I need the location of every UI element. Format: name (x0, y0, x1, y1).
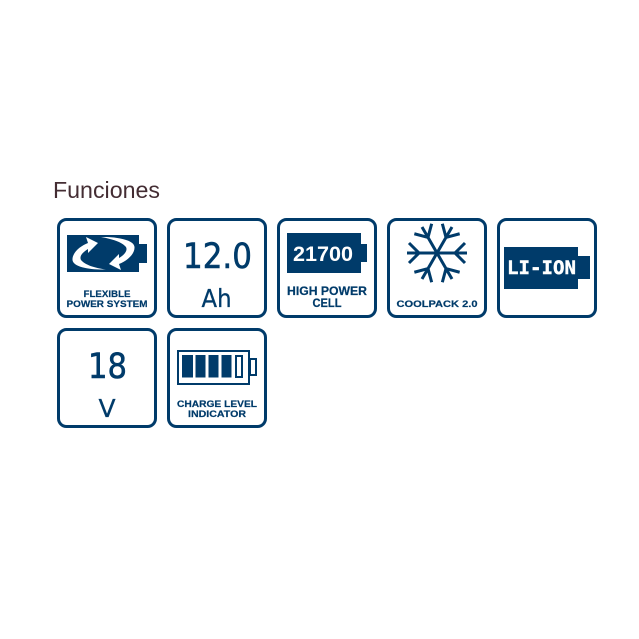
label: flexible power system: FLEXIBLE (84, 289, 131, 300)
label: coolpack 2.0: COOLPACK 2.0 (396, 299, 478, 310)
label: charge level indicator: CHARGE LEVEL (177, 399, 257, 410)
label: charge level indicator (177, 399, 257, 420)
label: high power cell: CELL (312, 298, 342, 310)
label: charge level indicator: INDICATOR (188, 409, 246, 420)
label: flexible power system (66, 289, 148, 310)
panel: high power cell (278, 220, 376, 316)
icon: battery level (178, 351, 256, 384)
label: high power cell (287, 286, 368, 310)
icon: battery li-ion: LI-ION (507, 257, 576, 279)
label: high power cell: HIGH POWER (287, 286, 368, 298)
title: Funciones (53, 177, 160, 203)
unit: V: V (98, 394, 116, 423)
icon: battery with circular arrows (67, 235, 147, 272)
icon: snowflake (407, 222, 467, 284)
panel: li-ion (498, 220, 596, 316)
panel: 18 V (58, 330, 156, 426)
icon: battery 21700: 21700 (293, 242, 353, 266)
panel: 12.0 Ah (168, 220, 266, 316)
value: 12.0: 12.0 (183, 237, 252, 277)
label: flexible power system: POWER SYSTEM (66, 299, 148, 310)
value: 18: 18 (88, 347, 127, 387)
panel: charge level indicator (168, 330, 266, 426)
unit: Ah: Ah (202, 284, 232, 313)
panel: flexible power system (58, 220, 156, 316)
panel: coolpack 2.0 (388, 220, 486, 316)
